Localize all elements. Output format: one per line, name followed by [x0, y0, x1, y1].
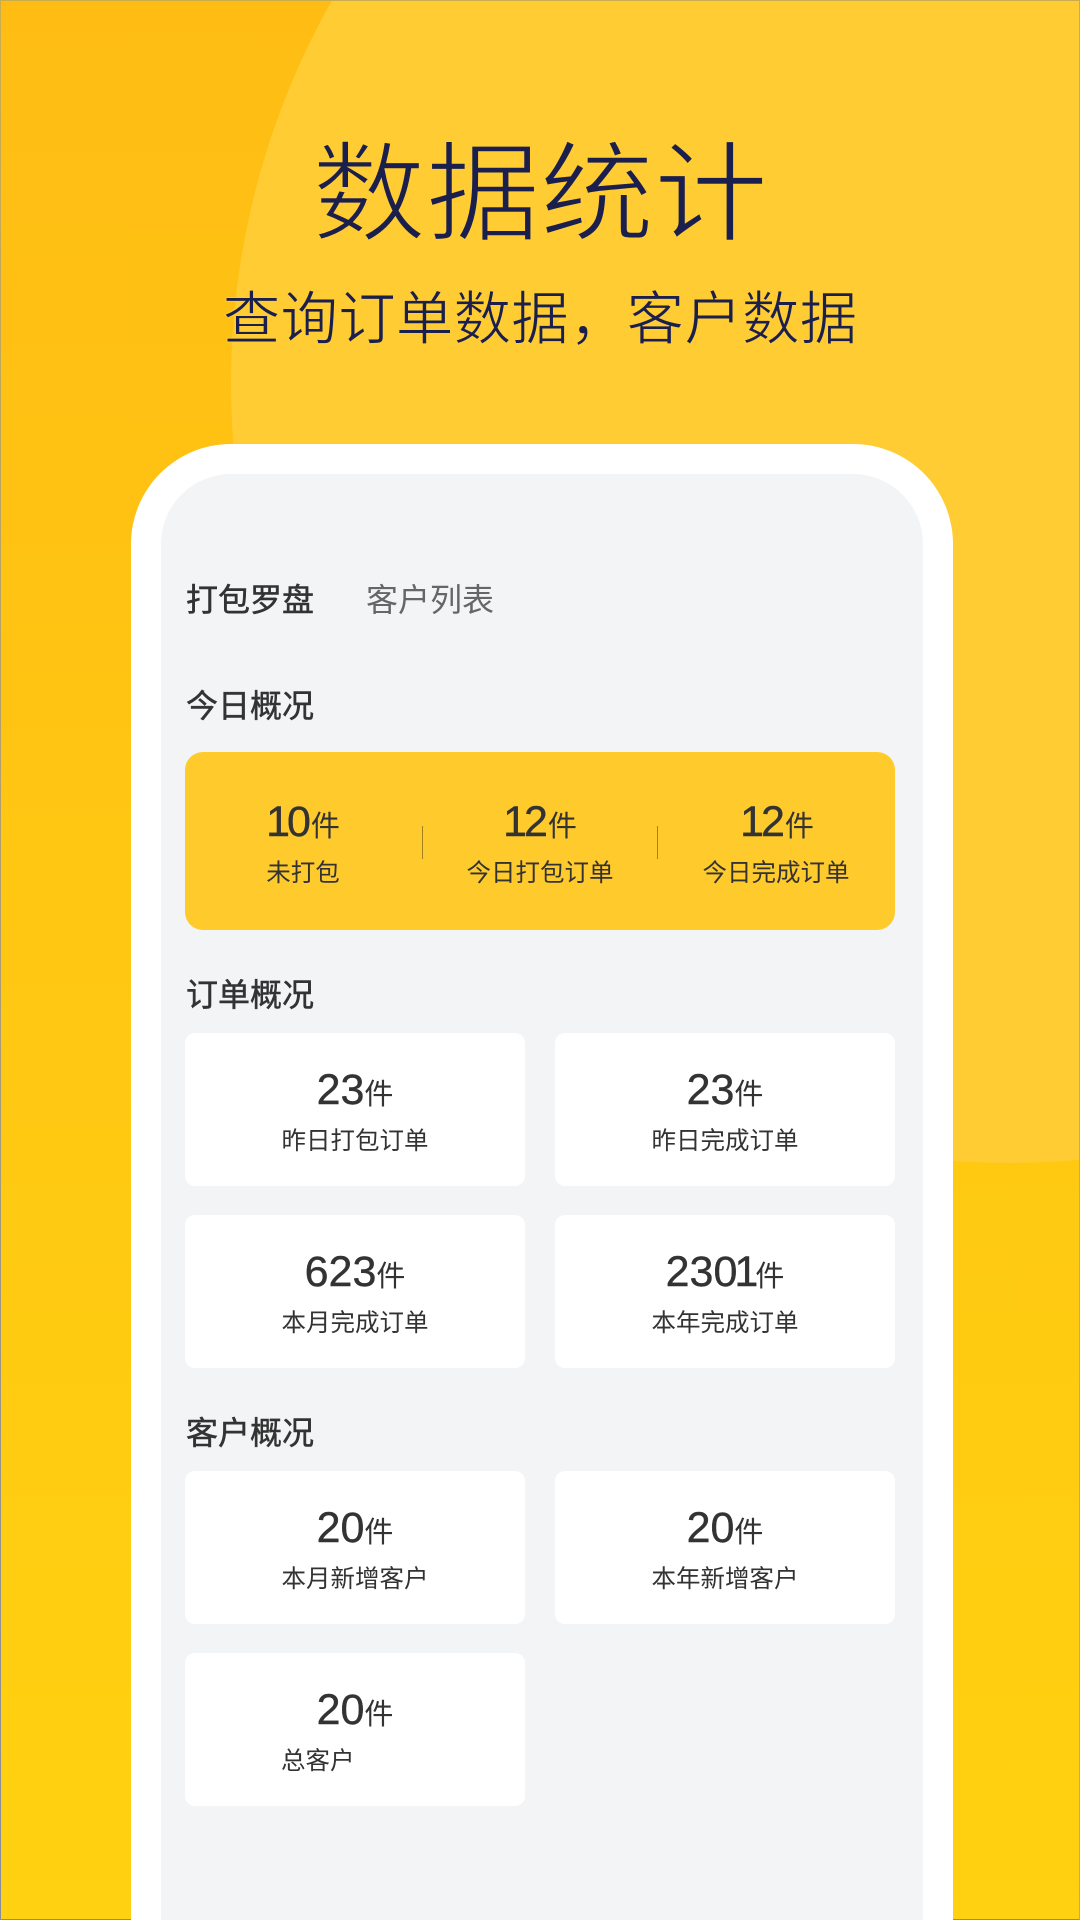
stat: completed today: [702, 798, 850, 887]
heading: order overview: 订单概况: [186, 977, 314, 1013]
phone screen: [161, 474, 923, 1920]
tab: packing compass: 打包罗盘: [186, 582, 314, 618]
card: completed this month: 623件: [305, 1248, 405, 1296]
stat: unpacked: 未打包: [266, 860, 340, 887]
card: completed this month: [185, 1215, 525, 1368]
card: packed yesterday: 昨日打包订单: [282, 1128, 428, 1155]
card: completed yesterday: 昨日完成订单: [652, 1128, 798, 1155]
stat: completed today: 12件: [740, 798, 814, 846]
card: new customers this year: [555, 1471, 895, 1624]
card: completed this year: 本年完成订单: [652, 1310, 798, 1337]
card: new customers this year: 20件: [687, 1504, 763, 1552]
card: completed this year: 2301件: [666, 1248, 784, 1296]
card: total customers: 20件: [317, 1686, 393, 1734]
tab: customer list: 客户列表: [366, 582, 494, 618]
title: 数据统计: [312, 135, 768, 256]
card: total customers: 总客户: [281, 1748, 354, 1775]
stat: unpacked: 10件: [266, 798, 340, 846]
card: completed this month: 本月完成订单: [282, 1310, 428, 1337]
subtitle: 查询订单数据，客户数据: [223, 288, 857, 352]
stat: unpacked: [266, 798, 340, 887]
heading: today overview: 今日概况: [186, 688, 314, 724]
card: completed yesterday: 23件: [687, 1066, 763, 1114]
stat: completed today: 今日完成订单: [702, 860, 850, 887]
decorative large circle: [231, 0, 1080, 1163]
card: completed yesterday: [555, 1033, 895, 1186]
stat: packed today: [466, 798, 614, 887]
panel: today stats: [185, 752, 895, 930]
card: completed this year: [555, 1215, 895, 1368]
card: new customers this month: [185, 1471, 525, 1624]
card: total customers: [185, 1653, 525, 1806]
card: packed yesterday: 23件: [317, 1066, 393, 1114]
stat: packed today: 今日打包订单: [466, 860, 614, 887]
stat: packed today: 12件: [503, 798, 577, 846]
card: new customers this month: 本月新增客户: [282, 1566, 428, 1593]
phone frame: [131, 444, 953, 1920]
card: packed yesterday: [185, 1033, 525, 1186]
card: new customers this year: 本年新增客户: [652, 1566, 798, 1593]
heading: customer overview: 客户概况: [186, 1415, 314, 1451]
card: new customers this month: 20件: [317, 1504, 393, 1552]
